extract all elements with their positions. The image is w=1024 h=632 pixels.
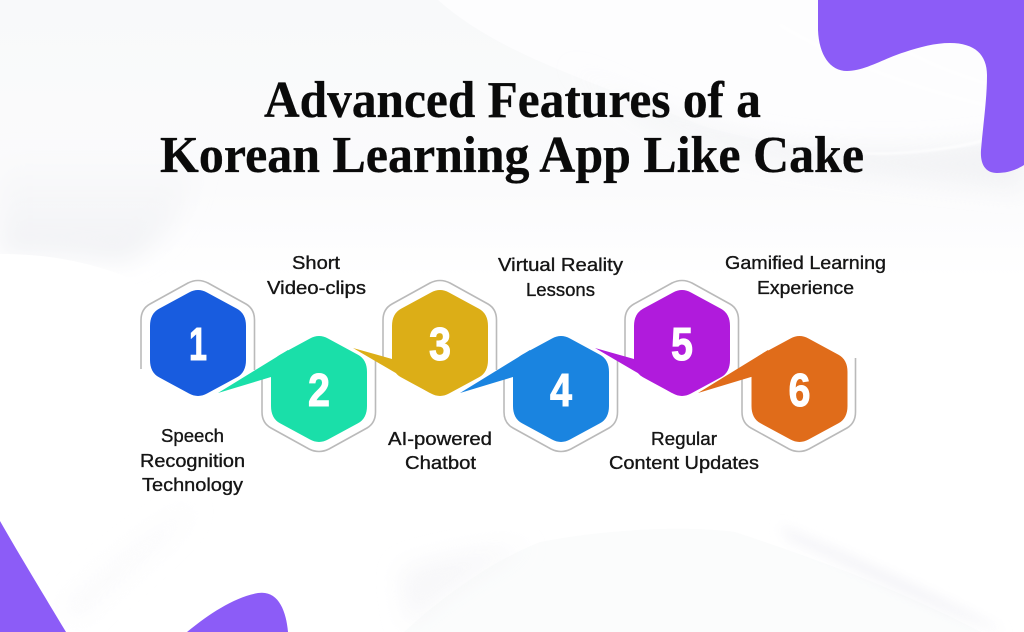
decorative purple blob: top right [818, 0, 1024, 173]
decorative purple blob: bottom centre-left [187, 593, 288, 632]
label: speech recognition technology: Recognition [140, 450, 245, 471]
decorative purple blob: bottom left [0, 521, 66, 632]
label: short video-clips: Short [292, 252, 340, 273]
title [160, 72, 864, 184]
label: regular content updates: Content Updates [609, 452, 759, 473]
label: regular content updates: Regular [651, 428, 717, 449]
step 6: gamified learning hexagon with tail [698, 336, 848, 442]
label: virtual reality lessons [498, 254, 624, 300]
step 6: gamified learning hexagon with tail: 6 [788, 364, 810, 416]
step 5: regular content updates hexagon with tail [595, 290, 730, 396]
label: virtual reality lessons: Virtual Reality [498, 254, 624, 275]
step 5: regular content updates hexagon with tail: 5 [671, 318, 693, 370]
label: virtual reality lessons: Lessons [526, 279, 595, 300]
step 1: speech recognition hexagon: 1 [189, 318, 207, 370]
step 1: speech recognition hexagon [150, 290, 246, 396]
step 4: virtual reality lessons hexagon with tail: 4 [550, 364, 572, 416]
step 3: AI-powered chatbot hexagon with tail: 3 [429, 318, 451, 370]
label: short video-clips: Video-clips [267, 277, 366, 298]
label: gamified learning experience [725, 252, 886, 298]
label: regular content updates [609, 428, 759, 473]
label: AI-powered chatbot: Chatbot [405, 452, 476, 473]
label: AI-powered chatbot: AI-powered [388, 428, 492, 449]
title: Advanced Features of a [264, 72, 761, 129]
label: short video-clips [267, 252, 366, 298]
hexagon outlines [141, 280, 856, 452]
title: Korean Learning App Like Cake [160, 127, 864, 184]
label: speech recognition technology [140, 425, 245, 495]
label: gamified learning experience: Experience [757, 277, 854, 298]
step 4: virtual reality lessons hexagon with tail [460, 336, 609, 442]
label: AI-powered chatbot [388, 428, 492, 473]
step 2: short video-clips hexagon with tail [218, 336, 367, 442]
label: speech recognition technology: Speech [161, 425, 224, 446]
label: gamified learning experience: Gamified Learning [725, 252, 886, 273]
step 3: AI-powered chatbot hexagon with tail [353, 290, 488, 396]
step 2: short video-clips hexagon with tail: 2 [308, 364, 330, 416]
label: speech recognition technology: Technology [142, 474, 244, 495]
